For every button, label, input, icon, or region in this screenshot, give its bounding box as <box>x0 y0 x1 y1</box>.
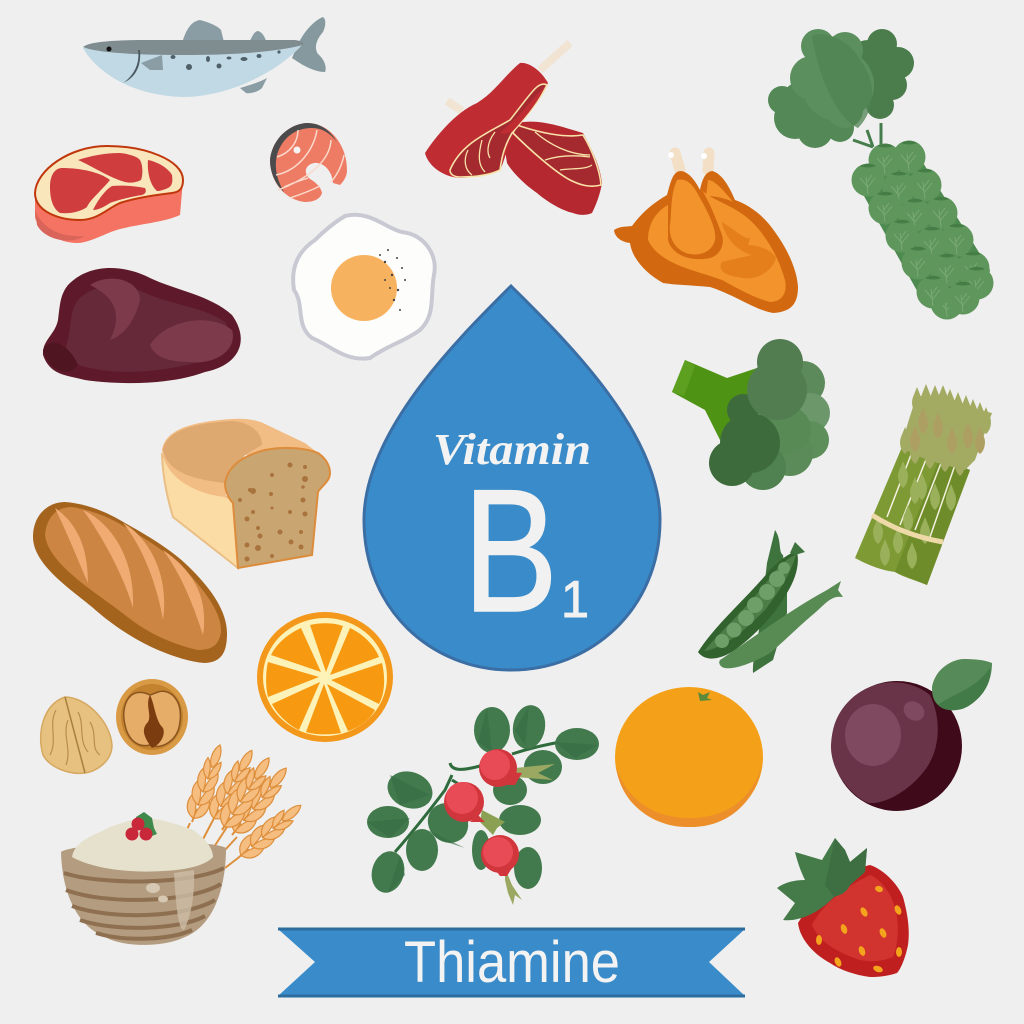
ribbon banner <box>278 929 745 996</box>
icon: orange slice <box>257 612 393 742</box>
icon: kale leaves <box>768 29 914 148</box>
icon: water drop <box>364 286 660 670</box>
icon: brussels sprouts stalk <box>852 140 994 320</box>
banner text: Thiamine: Thiamine <box>404 930 620 995</box>
icon: broccoli <box>672 339 830 490</box>
icon: plum <box>831 659 992 811</box>
heading: B: B <box>463 454 558 649</box>
heading: Vitamin: Vitamin <box>433 425 591 474</box>
icon: roast chicken <box>614 152 798 313</box>
icon: strawberry <box>777 838 909 977</box>
icon: bread loaf <box>162 419 330 568</box>
icon: asparagus <box>855 384 992 585</box>
icon: porridge bowl with wheat <box>61 741 308 945</box>
icon: lamb chops <box>425 43 602 215</box>
icon: baguette <box>33 502 227 663</box>
icon: rose hip branch <box>367 703 599 905</box>
icon: liver <box>43 268 241 383</box>
icon: walnuts <box>41 679 188 773</box>
icon: beef steak <box>35 146 183 243</box>
icon: fried egg <box>293 215 435 359</box>
heading: 1: 1 <box>561 571 589 629</box>
icon: peas <box>698 530 843 673</box>
icon: salmon steak <box>270 123 347 202</box>
icon: fish <box>83 17 326 97</box>
icon: orange <box>615 687 763 827</box>
